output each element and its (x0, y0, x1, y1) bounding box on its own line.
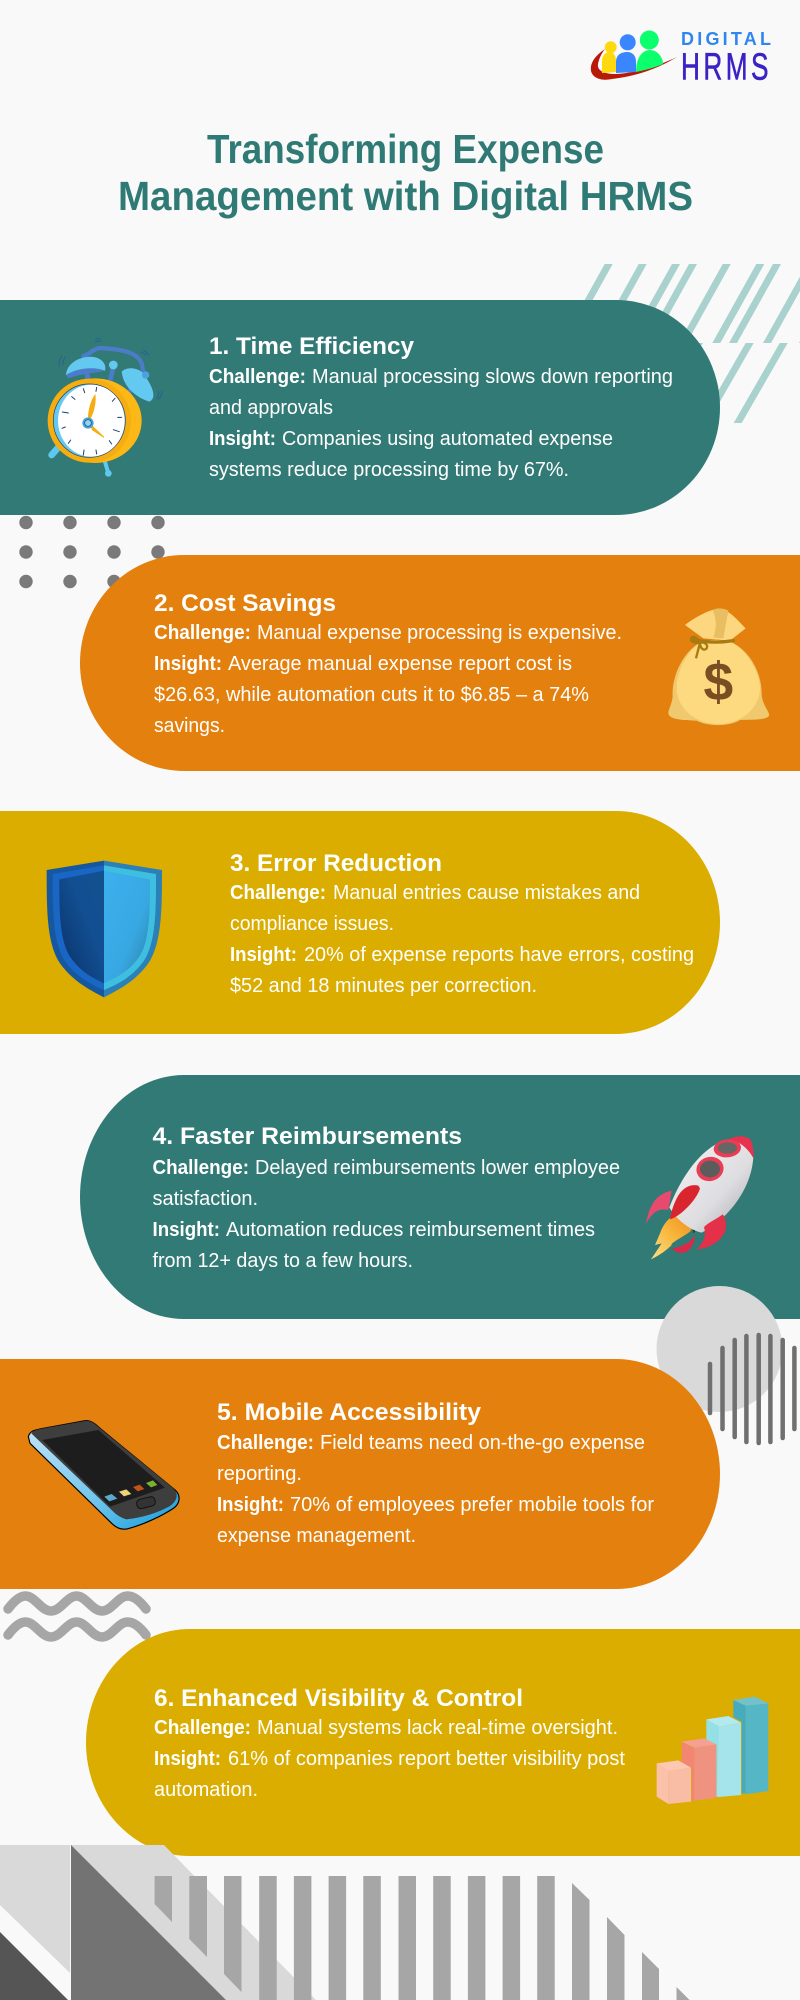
panel: 6 Enhanced Visibility & Control (86, 1629, 800, 1856)
body text (154, 622, 622, 737)
heading: 3. Error Reduction (230, 850, 442, 877)
body text: Insight: (209, 428, 276, 450)
body text: Field teams need on-the-go expense (320, 1432, 645, 1454)
body text: Challenge: (209, 366, 306, 388)
body text: satisfaction. (152, 1188, 258, 1210)
body text: Challenge: (152, 1157, 249, 1179)
body text: Manual processing slows down reporting (312, 366, 673, 388)
body text: Challenge: (154, 622, 251, 644)
dollar sign: $ (703, 653, 733, 712)
body text: $52 and 18 minutes per correction. (230, 975, 537, 997)
body text: Insight: (154, 653, 222, 675)
decoration: vertical sound-wave lines (710, 1335, 794, 1443)
body text (217, 1432, 654, 1547)
body text: 20% of expense reports have errors, costing (304, 944, 694, 966)
body text: Average manual expense report cost is (228, 653, 572, 675)
body text: Insight: (154, 1748, 221, 1770)
heading: 5. Mobile Accessibility (217, 1399, 482, 1426)
body text: Manual expense processing is expensive. (257, 622, 622, 644)
decoration: diagonal hatch (561, 264, 800, 423)
body text: savings. (154, 715, 225, 737)
icon: rocket (646, 1136, 754, 1259)
panel: 3 Error Reduction (0, 811, 720, 1034)
decoration: dot grid (19, 516, 165, 588)
body text: Challenge: (230, 882, 326, 904)
body text (154, 1717, 625, 1801)
title: Transforming Expense (207, 126, 604, 172)
body text: $26.63, while automation cuts it to $6.85 – a 74% (154, 684, 589, 706)
body text: reporting. (217, 1463, 302, 1485)
body text (209, 366, 673, 481)
body text: Delayed reimbursements lower employee (255, 1157, 620, 1179)
decoration: bottom vertical stripes (155, 1876, 690, 2000)
decoration: gray circle (656, 1286, 782, 1412)
panel: 4 Faster Reimbursements (80, 1075, 800, 1319)
panel: 2 Cost Savings (80, 555, 800, 771)
body text (152, 1157, 620, 1272)
body text: expense management. (217, 1525, 416, 1547)
logo people (602, 30, 663, 73)
decoration: bottom geometric shapes (0, 1845, 316, 2000)
heading: 4. Faster Reimbursements (152, 1123, 462, 1150)
body text: from 12+ days to a few hours. (152, 1250, 413, 1272)
heading: 6. Enhanced Visibility & Control (154, 1685, 523, 1712)
body text: Challenge: (217, 1432, 314, 1454)
body text: compliance issues. (230, 913, 394, 935)
icon: 3D bar chart (657, 1697, 768, 1804)
body text: Challenge: (154, 1717, 251, 1739)
body text: Companies using automated expense (282, 428, 613, 450)
body text: Insight: (230, 944, 297, 966)
title: Management with Digital HRMS (118, 173, 693, 219)
icon: shield (47, 861, 162, 997)
body text: systems reduce processing time by 67%. (209, 459, 569, 481)
body text: Insight: (152, 1219, 220, 1241)
body text: Manual entries cause mistakes and (333, 882, 640, 904)
icon: money bag (668, 608, 769, 725)
title (118, 126, 693, 219)
panel: 5 Mobile Accessibility (0, 1359, 720, 1589)
body text: automation. (154, 1779, 258, 1801)
body text: Manual systems lack real-time oversight. (257, 1717, 618, 1739)
body text (230, 882, 694, 997)
body text: and approvals (209, 397, 333, 419)
body text: Insight: (217, 1494, 284, 1516)
heading: 1. Time Efficiency (209, 333, 415, 360)
body text: Automation reduces reimbursement times (226, 1219, 595, 1241)
icon: smartphone (28, 1421, 179, 1529)
body text: 61% of companies report better visibility post (228, 1748, 625, 1770)
panel: 1 Time Efficiency (0, 300, 720, 515)
icon: alarm clock (48, 338, 162, 477)
decoration: zigzag waves (8, 1596, 146, 1637)
body text: 70% of employees prefer mobile tools for (290, 1494, 654, 1516)
logo: Digital HRMS (591, 29, 772, 88)
logo swoosh (591, 49, 677, 80)
heading: 2. Cost Savings (154, 590, 336, 617)
logo wordmark: DIGITAL: DIGITAL (681, 29, 771, 49)
